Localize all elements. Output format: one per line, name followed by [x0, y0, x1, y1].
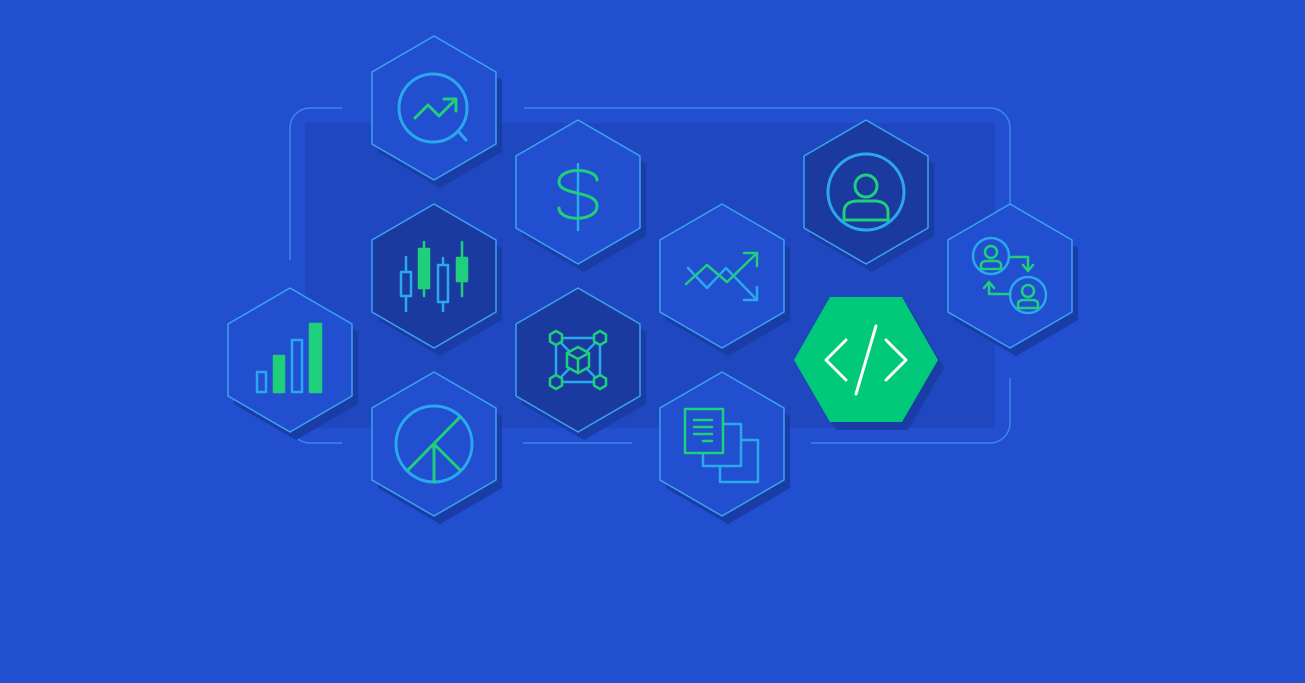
hex: documents	[660, 372, 790, 524]
hex: dollar	[516, 120, 646, 272]
hex: code (green)	[794, 297, 944, 430]
hex: user swap	[948, 204, 1078, 356]
hex: blockchain cube	[516, 288, 646, 440]
background panel	[286, 104, 1014, 447]
hex: zigzag trends	[660, 204, 790, 356]
hex: bar chart	[228, 288, 358, 440]
hex: candlesticks	[372, 204, 502, 356]
hex: search trend	[372, 36, 502, 188]
hex: pie chart	[372, 372, 502, 524]
hex: user profile	[804, 120, 934, 272]
